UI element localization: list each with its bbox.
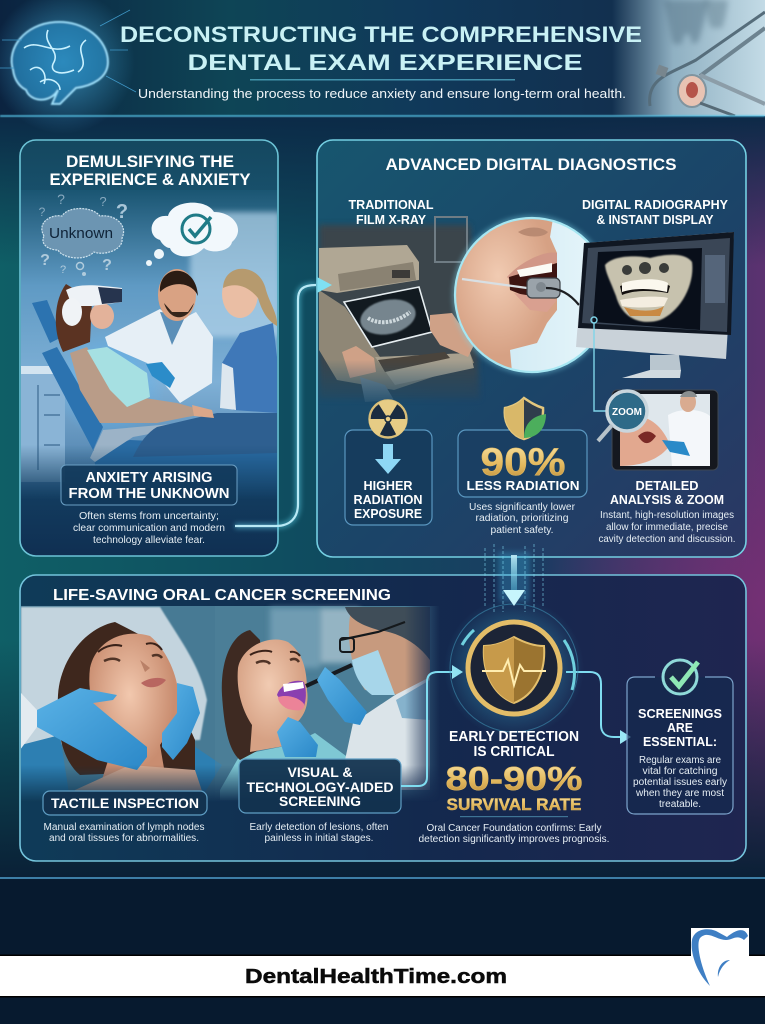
face [89, 634, 179, 786]
chair [32, 300, 103, 450]
machine lower body [319, 290, 474, 390]
stat: early detection and survival rate: IS CRITICAL [474, 744, 555, 760]
gloved hands [20, 692, 37, 750]
text: anxiety description: technology alleviate fear. [93, 535, 205, 546]
title: DENTAL EXAM EXPERIENCE [188, 50, 582, 75]
label: tactile inspection [43, 791, 207, 815]
cloud: unknown: ? [57, 191, 65, 207]
dentist gloves [317, 667, 367, 725]
title [120, 22, 642, 75]
nurse [222, 323, 277, 413]
stat: early detection and survival rate: 80-90% [446, 760, 582, 797]
label: traditional film x-ray [348, 198, 434, 227]
label: visual and technology-aided screening: VISUAL & [288, 764, 352, 780]
card: screenings are essential: ESSENTIAL: [643, 735, 717, 749]
stat: early detection and survival rate: detection significantly improves prognosis. [418, 834, 610, 845]
icon: down arrow [375, 444, 401, 474]
label: digital radiography: DIGITAL RADIOGRAPHY [582, 198, 729, 212]
icon: radiation symbol [369, 400, 407, 438]
open mouth [277, 681, 306, 708]
card: higher radiation exposure [345, 400, 432, 525]
cloud: unknown: ? [102, 257, 112, 274]
glove [146, 362, 175, 388]
text: visual screening description: Early detection of lesions, often [250, 822, 388, 833]
icon: tablet with dentist and zoom lens [598, 390, 718, 470]
text: tactile description: and oral tissues for abnormalities. [49, 833, 199, 844]
machine top [319, 245, 419, 293]
photo: visual and technology-aided screening [215, 606, 441, 806]
website name: DentalHealthTime.com [245, 966, 507, 988]
text: lower radiation description [469, 502, 576, 536]
card: screenings are essential: ARE [667, 721, 693, 735]
stat: early detection and survival rate: SURVIVAL RATE [446, 795, 582, 814]
icon: shield with leaf [505, 398, 546, 439]
card: screenings are essential: vital for catching [642, 766, 718, 777]
text: detailed analysis and zoom: DETAILED [636, 479, 698, 493]
card: screenings are essential: treatable. [659, 799, 701, 810]
card: screenings are essential: potential issues early [633, 777, 727, 788]
cloud: unknown: ? [116, 201, 128, 223]
card: higher radiation exposure: RADIATION [354, 493, 422, 507]
cloud: unknown: ? [60, 264, 66, 276]
x-ray film [344, 287, 432, 347]
arrow: early detection to screenings essential [566, 672, 631, 744]
cloud: unknown: ? [99, 194, 107, 209]
dental tools photo [650, 0, 765, 116]
panel: demulsifying the experience and anxiety [20, 140, 280, 556]
dentist head [349, 607, 430, 695]
text: lower radiation description: Uses significantly lower [469, 502, 576, 513]
card: 90 percent less radiation: LESS RADIATION [466, 478, 580, 493]
text: anxiety description [73, 511, 225, 546]
card: 90 percent less radiation: 90% [480, 441, 566, 484]
label: traditional film x-ray: FILM X-RAY [356, 213, 427, 227]
logo: tooth [691, 928, 749, 994]
label: traditional film x-ray: TRADITIONAL [348, 198, 434, 212]
text: anxiety description: clear communication and modern [73, 523, 225, 534]
text: detailed analysis and zoom: ANALYSIS & ZOOM [610, 493, 724, 507]
arrow: data stream from diagnostics down to screening [485, 544, 543, 612]
text: visual screening description: painless in initial stages. [264, 833, 374, 844]
cloud: confident check mark [146, 203, 238, 266]
illustration: film x-ray machine [319, 217, 480, 402]
patient torso [70, 347, 194, 423]
arrow: screening to early detection [401, 665, 463, 786]
cloud: unknown: ? [39, 205, 46, 219]
text: anxiety description: Often stems from uncertainty; [79, 511, 219, 522]
arrow: connector from anxiety panel to diagnostics [235, 277, 332, 526]
header banner [0, 0, 765, 134]
headphones [62, 298, 82, 326]
callout: anxiety arising from the unknown: FROM THE UNKNOWN [68, 486, 230, 502]
bib [220, 733, 346, 798]
label: digital radiography: & INSTANT DISPLAY [596, 213, 714, 227]
connector from monitor to zoom lens [591, 317, 607, 411]
instrument [306, 665, 352, 686]
face [90, 303, 114, 329]
dentist coat [105, 309, 213, 403]
icon: check circle [663, 660, 698, 694]
icon: tablet with dentist and zoom lens: ZOOM [612, 406, 642, 418]
hair [222, 630, 260, 760]
icon: glowing brain [0, 0, 136, 134]
text: detailed analysis and zoom: allow for immediate, precise [606, 522, 728, 533]
title: DECONSTRUCTING THE COMPREHENSIVE [120, 22, 642, 47]
footer band [0, 928, 765, 998]
callout: anxiety arising from the unknown [61, 465, 237, 505]
card: screenings are essential [627, 660, 733, 814]
subtitle: Understanding the process to reduce anxiety and ensure long-term oral health. [138, 86, 626, 101]
hand [192, 405, 214, 418]
dentist coat [345, 677, 430, 790]
illustration: patient with VR headset, dentist and nurse [21, 190, 280, 510]
hair [58, 622, 195, 775]
text: lower radiation description: radiation, prioritizing [476, 513, 568, 524]
heading [50, 153, 250, 189]
jeans [133, 413, 277, 457]
VR headset [66, 285, 122, 306]
text: detailed analysis and zoom: Instant, high-resolution images [600, 510, 734, 521]
heading: EXPERIENCE & ANXIETY [50, 171, 250, 189]
icon: golden shield with heartbeat [444, 598, 584, 738]
text: detailed analysis and zoom: cavity detection and discussion. [598, 534, 736, 545]
card: screenings are essential: when they are most [635, 788, 724, 799]
face [238, 640, 308, 752]
label: tactile inspection: TACTILE INSPECTION [51, 795, 199, 811]
curtain [190, 212, 280, 337]
card: higher radiation exposure: EXPOSURE [354, 507, 422, 521]
label: digital radiography [582, 198, 729, 227]
text: visual screening description [250, 822, 388, 844]
callout: anxiety arising from the unknown: ANXIETY ARISING [86, 470, 212, 486]
text: tactile description [44, 822, 204, 844]
coat behind patient [21, 607, 207, 745]
illustration: mouth close-up with digital sensor [450, 212, 612, 375]
photo: tactile lymph node inspection [20, 606, 441, 806]
panel: advanced digital diagnostics [235, 140, 746, 557]
heading: LIFE-SAVING ORAL CANCER SCREENING [53, 587, 391, 604]
heading: DEMULSIFYING THE [66, 153, 234, 171]
card: 90 percent less radiation [458, 398, 587, 497]
stat: early detection and survival rate: EARLY DETECTION [449, 729, 579, 745]
label: visual and technology-aided screening [239, 759, 401, 813]
cloud: unknown: ? [40, 252, 50, 269]
text: detailed analysis and zoom [598, 479, 736, 545]
cloud: unknown: Unknown [49, 226, 113, 242]
hair [56, 284, 92, 352]
chair [21, 736, 222, 792]
text: lower radiation description: patient safety. [490, 525, 554, 536]
cloud: unknown [39, 191, 128, 276]
card: screenings are essential: SCREENINGS [638, 707, 722, 721]
text: tactile description: Manual examination of lymph nodes [44, 822, 204, 833]
card: higher radiation exposure: HIGHER [364, 479, 412, 493]
illustration: monitor with dental scan [576, 232, 734, 378]
label: visual and technology-aided screening: SCREENING [279, 793, 361, 809]
stat: early detection and survival rate [418, 729, 610, 845]
panel: life-saving oral cancer screening [20, 575, 746, 861]
stat: early detection and survival rate: Oral Cancer Foundation confirms: Early [426, 823, 602, 834]
heading: ADVANCED DIGITAL DIAGNOSTICS [386, 155, 676, 174]
card: screenings are essential: Regular exams are [639, 755, 721, 766]
label: visual and technology-aided screening: TECHNOLOGY-AIDED [246, 779, 394, 795]
